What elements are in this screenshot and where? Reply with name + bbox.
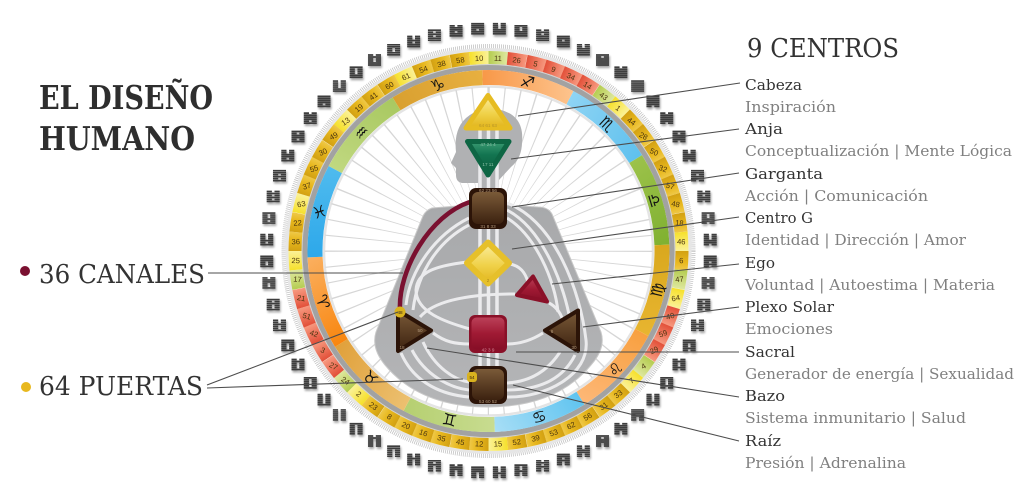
center: head <box>466 96 510 128</box>
label: garganta <box>744 167 928 205</box>
center: G: 2 <box>487 278 490 283</box>
ring of 64 gates: 7 <box>627 376 636 386</box>
gate marker 54: 54 <box>469 375 475 380</box>
label: centro g <box>745 211 966 249</box>
center: ego <box>517 276 547 302</box>
zodiac ring: ♊ <box>440 409 459 431</box>
ring of 64 gates: 19 <box>353 102 365 114</box>
center: G <box>467 242 509 284</box>
ring of 64 gates: 5 <box>532 59 539 69</box>
zodiac ring: ♑ <box>428 74 447 96</box>
ring of 64 gates: 36 <box>291 237 300 246</box>
label: cabeza: Inspiración <box>745 100 836 116</box>
center: throat: 62 23 56 <box>479 188 497 193</box>
label: ego: Voluntad | Autoestima | Materia <box>744 278 995 294</box>
graduated tick ring <box>284 46 693 456</box>
ring of 64 gates: 4 <box>639 361 648 371</box>
ring of 64 gates: 52 <box>512 437 522 447</box>
ring of 64 gates: 63 <box>296 199 306 209</box>
label: anja: Conceptualización | Mente Lógica <box>745 144 1012 160</box>
ring of 64 gates: 51 <box>301 311 312 322</box>
ring of 64 gates: 13 <box>340 115 352 128</box>
ring of 64 gates: 25 <box>291 256 300 265</box>
center: ajna: 47 24 4 <box>480 142 496 147</box>
ring of 64 gates: 14 <box>582 80 593 92</box>
label: anja: Anja <box>744 122 783 138</box>
center: solar plexus: 30 <box>571 345 577 350</box>
ring of 64 gates: 9 <box>550 65 557 74</box>
heading: 9 centros: 9 CENTROS <box>747 34 899 64</box>
ring of 64 gates: 26 <box>512 55 522 65</box>
ring of 64 gates: 48 <box>671 199 681 209</box>
center: head: 64 61 63 <box>479 123 497 128</box>
gate marker 48 <box>394 306 406 318</box>
label: cabeza: Cabeza <box>745 78 802 94</box>
ring of 64 gates: 42 <box>308 328 319 339</box>
center: root <box>469 366 507 404</box>
label: ego: Ego <box>745 256 775 272</box>
ring of 64 gates: 6 <box>679 256 684 265</box>
label: bazo: Sistema inmunitario | Salud <box>745 411 966 427</box>
gate marker 54 <box>467 372 477 382</box>
ring of 64 gates: 62 <box>565 420 577 432</box>
ring of 64 gates: 31 <box>598 400 610 412</box>
title <box>39 78 213 158</box>
channels <box>401 130 586 397</box>
ring of 64 gates: 2 <box>354 389 363 399</box>
radial rays <box>386 149 590 353</box>
callout: 64 puertas: 64 PUERTAS <box>39 372 203 402</box>
ring of 64 gates: 57 <box>665 181 675 192</box>
title: EL DISEÑO <box>39 78 213 117</box>
zodiac ring <box>287 50 690 452</box>
ring of 64 gates: 16 <box>418 427 429 439</box>
gate marker 48: 48 <box>397 310 403 315</box>
center: spleen <box>398 310 431 351</box>
ring of 64 gates: 53 <box>548 427 559 439</box>
ring of 64 gates: 54 <box>418 64 429 75</box>
center: sacral <box>469 315 507 353</box>
ring of 64 gates: 59 <box>658 328 669 339</box>
zodiac ring: ♓ <box>310 201 329 223</box>
center: sacral: 42 3 9 <box>482 348 495 352</box>
ring of 64 gates: 33 <box>612 388 624 400</box>
ring of 64 gates: 21 <box>296 293 306 303</box>
ring of 64 gates: 40 <box>665 311 676 322</box>
ring of 64 gates: 45 <box>455 437 465 447</box>
center: ajna: 17 11 <box>482 162 494 167</box>
label: raiz: Presión | Adrenalina <box>745 456 906 472</box>
ring of 64 gates: 32 <box>657 163 668 174</box>
label: anja <box>744 122 1012 160</box>
ring of 64 gates <box>288 51 689 451</box>
ring of 64 gates: 23 <box>367 400 379 412</box>
ring of 64 gates: 15 <box>493 439 502 449</box>
activated channel <box>400 202 470 310</box>
center: spleen: 18 <box>399 345 405 350</box>
center: ajna <box>468 142 509 175</box>
ring of 64 gates: 37 <box>302 181 312 192</box>
zodiac ring: ♎ <box>643 191 666 210</box>
ring of 64 gates: 60 <box>384 80 395 92</box>
center: solar plexus: 6 <box>551 329 554 334</box>
ring of 64 gates: 46 <box>677 237 686 246</box>
center: root: 53 60 52 <box>479 399 497 404</box>
ring of 64 gates: 29 <box>648 344 660 356</box>
label: sacral <box>745 345 1014 383</box>
label: sacral: Generador de energía | Sexualidad <box>745 367 1014 383</box>
zodiac ring: ♏ <box>595 112 619 136</box>
label: ego <box>744 256 995 294</box>
ring of 64 gates: 11 <box>494 54 502 63</box>
ring of hexagrams <box>260 24 717 477</box>
leader lines <box>207 83 740 441</box>
ring of 64 gates: 61 <box>400 71 412 83</box>
label: plexo solar <box>745 300 834 338</box>
label: sacral: Sacral <box>745 345 795 361</box>
ring of 64 gates: 22 <box>293 218 302 228</box>
label: centro g: Identidad | Dirección | Amor <box>745 233 966 249</box>
label: cabeza <box>745 78 836 116</box>
ring of 64 gates: 47 <box>675 275 684 284</box>
label: plexo solar: Emociones <box>745 322 833 338</box>
ring of 64 gates: 49 <box>328 130 340 142</box>
zodiac ring: ♍ <box>647 281 668 299</box>
label: raiz: Raíz <box>745 434 781 450</box>
ring of 64 gates: 58 <box>455 55 465 65</box>
center: solar plexus <box>545 310 578 351</box>
callout: 36 canales: 36 CANALES <box>39 260 205 290</box>
label: garganta: Acción | Comunicación <box>744 189 928 205</box>
label: centro g: Centro G <box>745 211 813 227</box>
ring of 64 gates: 20 <box>400 420 412 432</box>
ring of 64 gates: 41 <box>367 90 380 102</box>
ring of 64 gates: 27 <box>328 360 339 372</box>
ring of 64 gates: 3 <box>319 345 327 355</box>
title: HUMANO <box>39 119 195 158</box>
ring of 64 gates: 56 <box>582 411 594 423</box>
label: raiz <box>745 434 906 472</box>
zodiac ring: ♌ <box>604 358 627 381</box>
ring of 64 gates: 28 <box>637 130 649 142</box>
ring of 64 gates: 17 <box>293 275 302 284</box>
label: bazo: Bazo <box>745 389 785 405</box>
ring of 64 gates: 35 <box>436 433 447 444</box>
ring of 64 gates: 64 <box>671 293 681 303</box>
zodiac ring: ♐ <box>518 71 537 93</box>
zodiac ring: ♒ <box>350 121 373 144</box>
ring of 64 gates: 30 <box>317 146 329 158</box>
ring of 64 gates: 38 <box>436 59 447 69</box>
ring of 64 gates: 55 <box>309 163 320 174</box>
ring of 64 gates: 43 <box>597 90 610 102</box>
center: spleen: 50 <box>417 328 423 333</box>
center: throat <box>469 188 507 229</box>
ring of 64 gates: 1 <box>614 103 622 113</box>
ring of 64 gates: 34 <box>565 71 577 83</box>
label: bazo <box>745 389 966 427</box>
ring of 64 gates: 44 <box>625 115 637 128</box>
label: garganta: Garganta <box>745 167 823 183</box>
center: throat: 31 8 33 <box>480 224 496 229</box>
zodiac ring: ♉ <box>358 366 382 390</box>
label: plexo solar: Plexo Solar <box>745 300 834 316</box>
ring of 64 gates: 8 <box>385 412 393 422</box>
zodiac ring: ♈ <box>311 292 334 311</box>
ring of 64 gates: 10 <box>475 54 484 63</box>
ring of 64 gates: 12 <box>475 439 484 449</box>
zodiac ring: ♋ <box>530 406 549 428</box>
ring of 64 gates: 50 <box>648 146 660 158</box>
ring of 64 gates: 24 <box>339 375 351 387</box>
ring of 64 gates: 39 <box>530 433 541 444</box>
human silhouette <box>375 108 602 407</box>
ring of 64 gates: 18 <box>675 218 684 228</box>
